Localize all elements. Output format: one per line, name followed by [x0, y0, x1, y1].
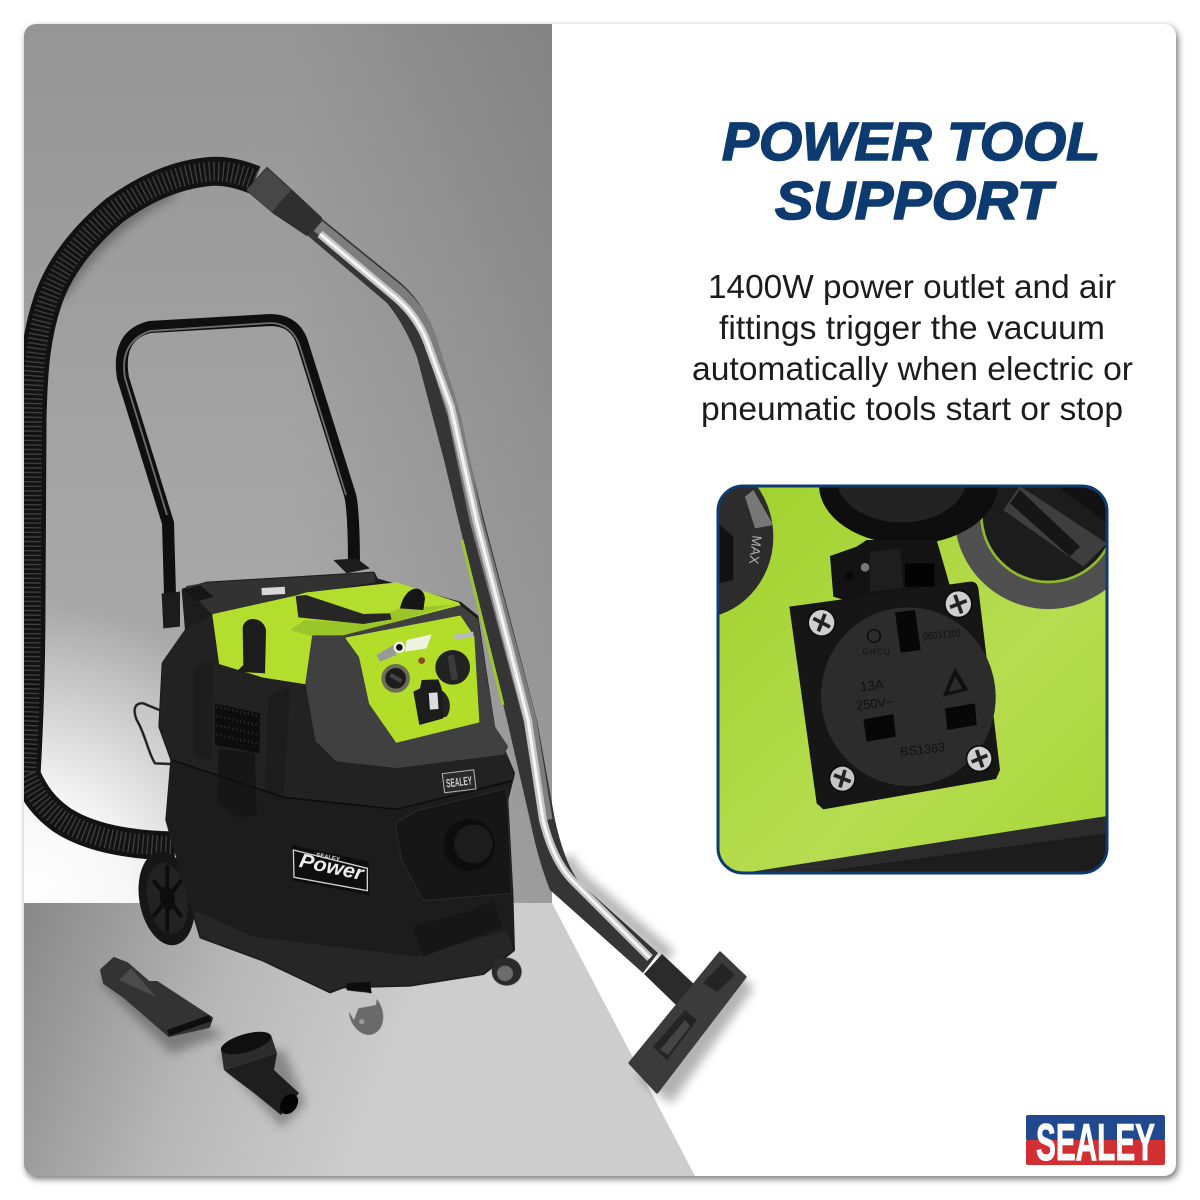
- vent panel: [195, 662, 288, 796]
- socket markings: GHCU: [862, 648, 890, 657]
- vacuum body: [132, 558, 522, 1039]
- air fitting: [377, 632, 473, 664]
- brush tool: [219, 1027, 302, 1118]
- front dial: [443, 819, 495, 871]
- ghcu logo: [868, 630, 880, 642]
- sealey badge: [442, 770, 476, 793]
- description text: pneumatic tools start or stop: [701, 390, 1123, 427]
- crevice tool: [101, 958, 212, 1036]
- rear lid label: [261, 587, 285, 595]
- description text: [692, 268, 1133, 427]
- hose: [26, 171, 255, 846]
- left dial: [381, 664, 410, 693]
- title: POWER TOOL: [722, 112, 1100, 172]
- neutral slot: [863, 714, 896, 742]
- body silhouette: [160, 573, 513, 992]
- hood: [216, 680, 514, 808]
- power gear badge: [292, 845, 369, 895]
- main wheel: [138, 852, 194, 946]
- power gear badge: SEALEY: [316, 853, 340, 863]
- left dial: [620, 455, 773, 618]
- lid latch: [237, 619, 266, 673]
- socket plate: [789, 582, 1000, 809]
- bottom dark edge: [743, 816, 1107, 873]
- power cable: [135, 703, 172, 764]
- right dial: [435, 650, 470, 685]
- title: SUPPORT: [775, 171, 1056, 231]
- soft shadows: [55, 186, 751, 1123]
- live slot: [945, 703, 977, 730]
- handle: [122, 320, 354, 595]
- base: [193, 910, 513, 992]
- inset border: [718, 486, 1107, 873]
- panel: left photo: [24, 24, 751, 1176]
- hinge: [830, 540, 951, 605]
- backdrop floor: [24, 903, 695, 1176]
- screws: [807, 590, 993, 792]
- triangle mark: [943, 667, 968, 697]
- socket markings: 13A: [859, 677, 885, 694]
- base recess: [422, 948, 444, 956]
- socket markings: [855, 628, 962, 759]
- power outlet: [413, 679, 450, 725]
- panel bezel: [307, 607, 507, 767]
- rear latch: [400, 589, 425, 610]
- chrome wand: [247, 168, 658, 973]
- mid seam: [173, 761, 513, 809]
- socket markings: 06031302: [922, 628, 962, 643]
- lime panel: [718, 486, 1107, 873]
- socket face: [809, 596, 1007, 797]
- floor nozzle: [630, 953, 745, 1092]
- inset photo: power outlet: [620, 421, 1142, 873]
- backdrop wall: [24, 24, 552, 904]
- description text: fittings trigger the vacuum: [719, 309, 1105, 346]
- brackets: [162, 592, 180, 628]
- rear lid: [187, 573, 375, 615]
- description text: 1400W power outlet and air: [708, 268, 1116, 305]
- sealey badge: SEALEY: [445, 773, 473, 791]
- carry bar: [296, 595, 392, 624]
- earth slot: [895, 610, 921, 653]
- title: [722, 112, 1100, 231]
- control panel: [347, 617, 478, 742]
- flip lid: [819, 426, 998, 544]
- hose cuff: [247, 168, 321, 235]
- right dial: [954, 421, 1142, 609]
- green lid: [213, 583, 463, 683]
- left dial: MAX: [746, 535, 765, 565]
- green tray: [290, 603, 458, 637]
- power gear badge: Power: [297, 850, 367, 885]
- description text: automatically when electric or: [692, 350, 1133, 387]
- socket markings: 250V~: [855, 694, 894, 713]
- rear caster: [492, 958, 522, 986]
- socket markings: BS1363: [900, 740, 946, 759]
- front panel: [395, 788, 512, 901]
- front caster: [343, 982, 389, 1039]
